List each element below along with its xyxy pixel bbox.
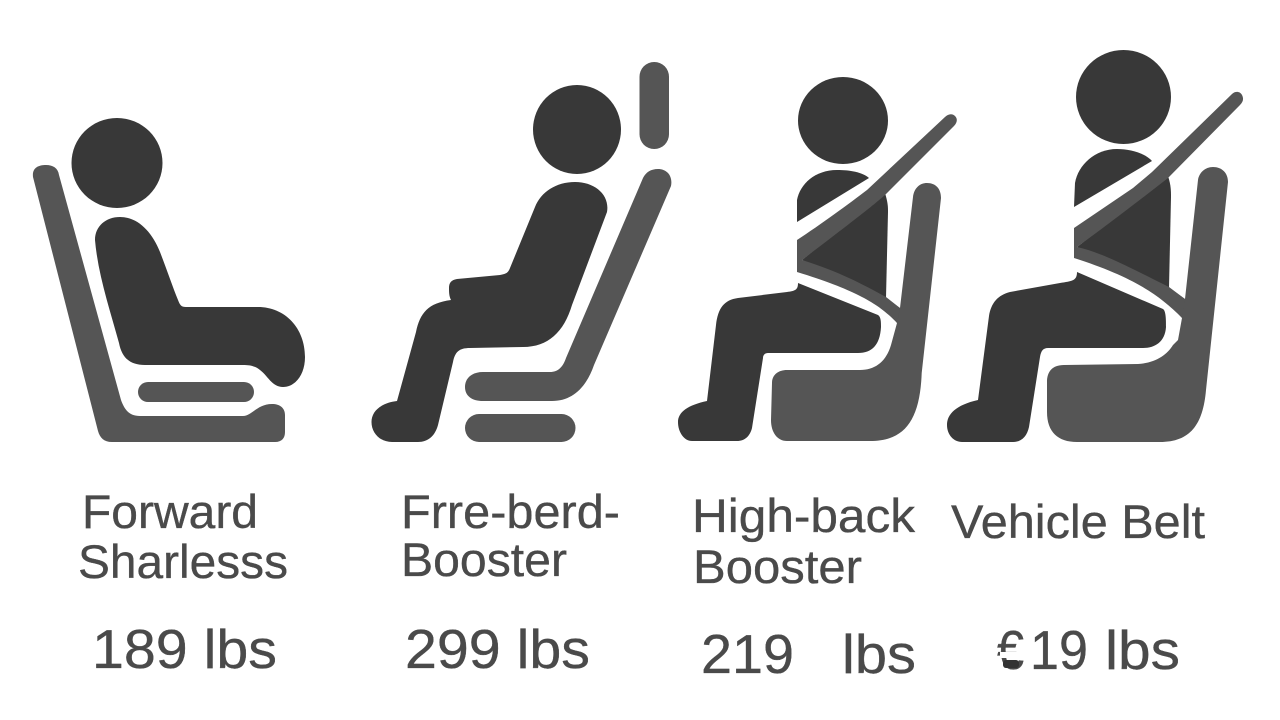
torso <box>802 193 888 298</box>
upper chest <box>797 170 869 222</box>
torso <box>1077 176 1171 288</box>
label: High-back Booster: High-back <box>692 490 915 543</box>
weight: 219 lbs: 219 <box>701 623 794 685</box>
shoulder and lap belt <box>797 114 957 323</box>
icon: free-standing booster with child <box>372 62 671 442</box>
label: Forward Sharlesss: Forward <box>82 486 258 539</box>
icon: high-back booster with belted child <box>678 77 957 441</box>
shoulder and lap belt <box>1074 92 1243 318</box>
weight: 219 lbs <box>701 623 916 685</box>
head <box>1076 50 1171 144</box>
label: Forward Sharlesss: Sharlesss <box>78 536 288 589</box>
label: Frre-berd-Booster: Frre-berd- <box>401 486 620 539</box>
seat shell <box>33 165 285 442</box>
label: High-back Booster: Booster <box>693 541 862 594</box>
icon: vehicle belt with child <box>947 50 1243 442</box>
head <box>798 77 888 164</box>
weight: €19 lbs <box>997 619 1180 681</box>
body <box>95 217 305 387</box>
upper chest <box>1074 149 1152 207</box>
head <box>533 85 621 174</box>
legs <box>947 272 1166 442</box>
seat cushion <box>138 382 254 402</box>
weight: 189 lbs: 189 lbs <box>92 618 277 680</box>
seat <box>771 183 941 441</box>
weight: €19 lbs: 19 <box>1030 619 1088 681</box>
weight: 299 lbs: 299 lbs <box>405 618 590 680</box>
head <box>72 118 162 208</box>
booster cushion <box>465 414 576 442</box>
label: Vehicle Belt: Vehicle Belt <box>951 496 1205 549</box>
label: Frre-berd-Booster <box>401 486 620 587</box>
label: Forward Sharlesss <box>78 486 288 589</box>
weight: €19 lbs: lbs <box>1105 619 1180 681</box>
seat back and base <box>465 169 671 401</box>
legs <box>678 283 881 441</box>
label: High-back Booster <box>692 490 915 594</box>
seat <box>1047 167 1228 442</box>
headrest <box>640 62 669 149</box>
label: Frre-berd-Booster: Booster <box>401 534 567 587</box>
weight: 219 lbs: lbs <box>842 623 916 685</box>
icon: forward-facing seat with child <box>33 118 305 442</box>
body <box>372 182 607 442</box>
weight: €19 lbs: € <box>997 619 1024 681</box>
